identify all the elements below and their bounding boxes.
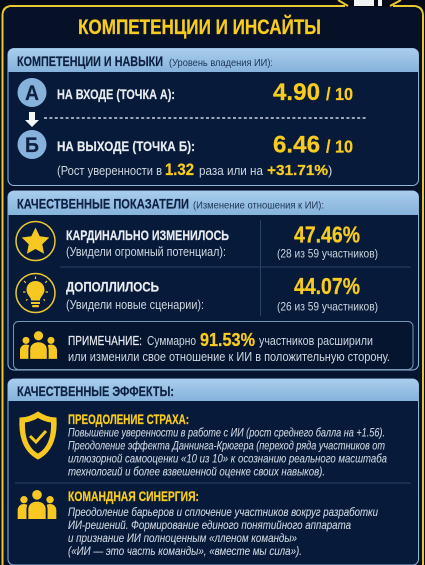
radical change value: 47.46% <box>294 222 360 248</box>
icon: light bulb <box>16 274 55 312</box>
growth text <box>57 160 332 179</box>
icon: team <box>18 490 56 519</box>
top emblem <box>338 0 401 6</box>
panel header: indicators <box>8 191 418 215</box>
point B badge <box>18 130 46 159</box>
radical change label: (Увидели огромный потенциал): <box>66 244 226 259</box>
synergy body: и признание ИИ полноценным «лленом команды» <box>68 531 297 545</box>
point B score: / 10 <box>326 136 353 156</box>
icon: team <box>20 331 57 359</box>
point A badge <box>18 78 46 107</box>
fear heading: ПРЕОДОЛЕНИЕ СТРАХА: <box>68 412 189 427</box>
point A score: / 10 <box>326 84 353 104</box>
point A badge: А <box>25 82 39 105</box>
panel header: indicators: (Изменение отношения к ИИ): <box>193 200 324 212</box>
point B score <box>273 132 353 158</box>
fear body <box>68 428 387 478</box>
radical change value <box>277 222 378 260</box>
supplemented label: (Увидели новые сценарии): <box>66 297 204 312</box>
growth text: +31.71% <box>267 162 328 179</box>
point A score <box>273 79 353 106</box>
supplemented value: (26 из 59 участников) <box>277 300 378 314</box>
panel header: effects: КАЧЕСТВЕННЫЕ ЭФФЕКТЫ: <box>17 383 174 399</box>
icon: shield with check <box>20 412 56 459</box>
title: КОМПЕТЕНЦИИ И ИНСАЙТЫ <box>78 14 321 39</box>
synergy body: ИИ-решений. Формирование единого понятийного аппарата <box>68 518 351 532</box>
radical change value: (28 из 59 участников) <box>277 246 378 260</box>
note text: ПРИМЕЧАНИЕ: <box>68 333 142 348</box>
panel header: competencies <box>8 48 418 72</box>
panel: competencies and skills <box>8 48 418 186</box>
panel: qualitative indicators <box>8 191 418 370</box>
radical change label <box>66 227 229 259</box>
note text: Суммарно <box>147 333 196 348</box>
radical change label: КАРДИНАЛЬНО ИЗМЕНИЛОСЬ <box>66 227 229 243</box>
point A label: НА ВХОДЕ (ТОЧКА А): <box>57 86 175 102</box>
panel header: competencies: (Уровень владения ИИ): <box>169 57 273 69</box>
supplemented label: ДОПОЛЛИЛОСЬ <box>66 278 159 294</box>
growth text: раза или на <box>199 163 264 178</box>
growth text: ) <box>328 163 332 178</box>
panel header: competencies: КОМПЕТЕНЦИИ И НАВЫКИ <box>17 53 163 69</box>
note text <box>68 330 390 364</box>
note text: участников расширили <box>259 333 373 348</box>
synergy body: («ИИ — это часть команды», «вместе мы сила»). <box>68 544 302 558</box>
supplemented value: 44.07% <box>294 273 360 299</box>
note box <box>14 322 413 370</box>
note text: 91.53% <box>200 330 255 350</box>
point A score: 4.90 <box>273 79 320 106</box>
point B badge: Б <box>25 134 39 157</box>
synergy heading: КОМАНДНАЯ СИНЕРГИЯ: <box>68 489 199 504</box>
growth text: (Рост уверенности в <box>57 163 162 178</box>
growth text: 1.32 <box>165 160 194 179</box>
synergy body <box>68 505 378 558</box>
icon: star <box>16 222 55 260</box>
supplemented label <box>66 278 204 312</box>
supplemented value <box>277 273 378 314</box>
panel: qualitative effects <box>8 379 418 565</box>
panel header: effects <box>8 379 418 401</box>
point B label: НА ВЫХОДЕ (ТОЧКА Б): <box>57 138 195 154</box>
panel header: indicators: КАЧЕСТВЕННЫЕ ПОКАЗАТЕЛИ <box>17 196 189 212</box>
fear body: технологий и более взвешенной оценке своих навыков). <box>68 466 325 478</box>
arrow from A to B <box>25 112 39 127</box>
point B score: 6.46 <box>273 132 320 158</box>
